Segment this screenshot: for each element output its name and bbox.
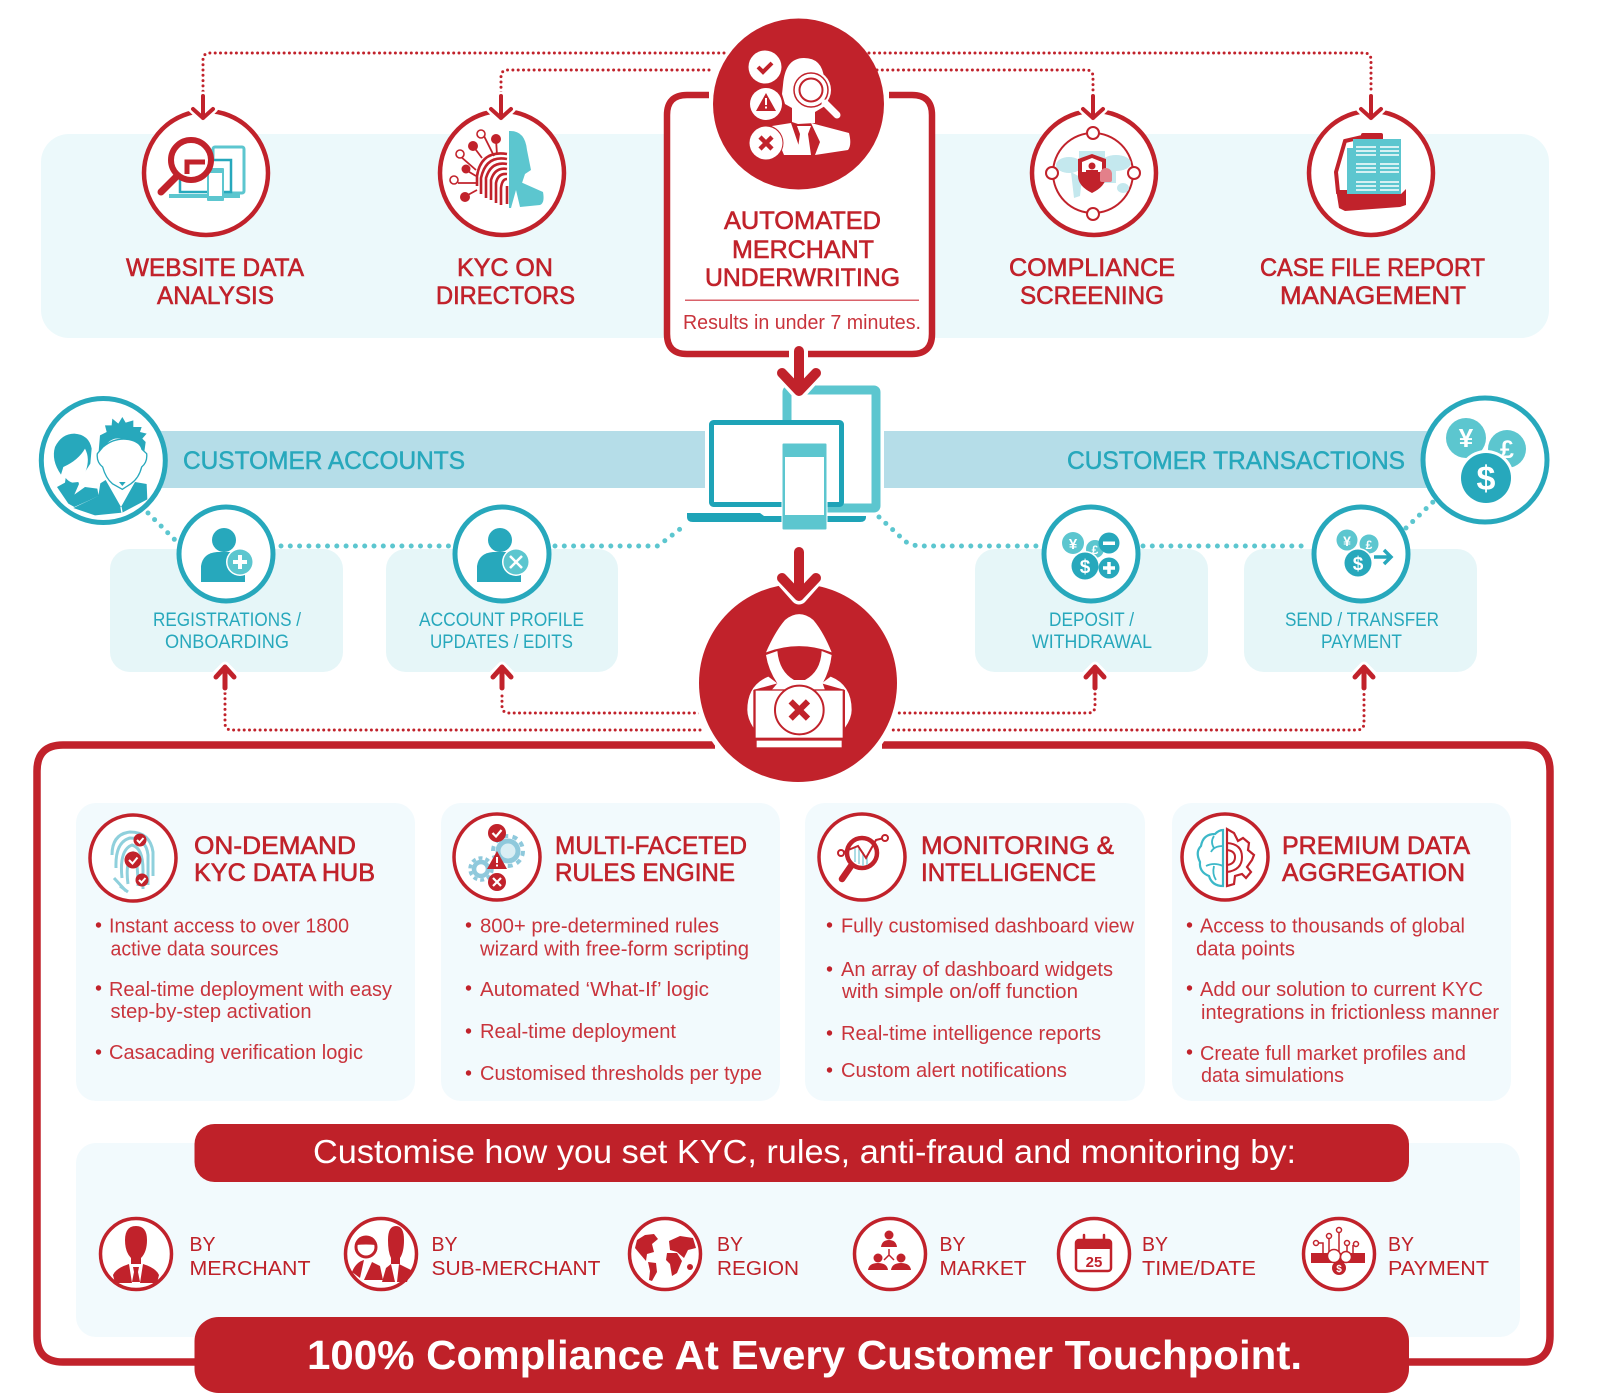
text: deposit withdrawal: WITHDRAWAL: [1032, 632, 1152, 653]
text: by time/date: [1142, 1234, 1256, 1280]
heading: premium data aggregation: PREMIUM DATA: [1282, 832, 1470, 860]
heading: on-demand KYC data hub: KYC DATA HUB: [194, 859, 375, 887]
icon: two people: [346, 1218, 416, 1290]
panel: customise options background: [76, 1143, 1520, 1337]
bullets: multi-faceted rules engine: Customised thresholds per type: [480, 1063, 762, 1085]
text: by merchant: MERCHANT: [190, 1258, 310, 1280]
icon: calendar: [1058, 1218, 1130, 1290]
service: website data analysis: [126, 96, 304, 310]
bullets: multi-faceted rules engine: [466, 916, 762, 1085]
heading: automated merchant underwriting: UNDERWRITING: [705, 264, 900, 292]
heading: multi-faceted rules engine: [555, 832, 747, 887]
bullets: monitoring and intelligence: Real-time intelligence reports: [841, 1023, 1101, 1045]
icon: underwriter with magnifier in red circle: [713, 18, 884, 190]
bullets: multi-faceted rules engine: Real-time deployment: [480, 1021, 676, 1043]
heading: KYC on directors: [436, 254, 575, 310]
heading: website data analysis: ANALYSIS: [157, 282, 274, 310]
text: by market: MARKET: [940, 1258, 1026, 1280]
icon: deposit withdrawal coins: [1044, 507, 1138, 601]
arrow: up to account profile: [492, 666, 512, 688]
bullets: premium data aggregation: Add our solution to current KYC: [1200, 979, 1483, 1001]
banner: customise heading: [194, 1124, 1409, 1182]
option: by market: [854, 1218, 1026, 1290]
heading: premium data aggregation: AGGREGATION: [1282, 859, 1465, 887]
panel: monitoring and intelligence: [805, 803, 1145, 1101]
heading: automated merchant underwriting: MERCHANT: [732, 236, 874, 264]
icon: merchant bust: [100, 1218, 172, 1290]
bullets: on-demand KYC data hub: step-by-step activation: [110, 1001, 312, 1023]
heading: premium data aggregation: [1282, 832, 1470, 887]
text: by merchant: [190, 1234, 310, 1280]
heading: on-demand KYC data hub: ON-DEMAND: [194, 832, 356, 860]
heading: case file report management: [1260, 254, 1485, 310]
text: send transfer payment: PAYMENT: [1321, 632, 1402, 653]
icon: world map globe: [630, 1218, 700, 1290]
bullets: on-demand KYC data hub: active data sources: [110, 938, 278, 960]
banner: customise heading: Customise how you set KYC, rules, anti-fraud and monitoring by:: [313, 1133, 1296, 1170]
bullets: multi-faceted rules engine: wizard with free-form scripting: [479, 938, 749, 960]
banner: customer accounts bar: [100, 431, 705, 488]
text: account profile updates: UPDATES / EDITS: [430, 632, 573, 653]
heading: website data analysis: [126, 254, 304, 310]
bullets: monitoring and intelligence: Custom alert notifications: [841, 1060, 1067, 1082]
panel: deposit withdrawal: [975, 549, 1208, 672]
text: by payment: BY: [1388, 1234, 1414, 1256]
panel: multi-faceted rules engine: [441, 803, 780, 1101]
text: registrations onboarding: [153, 610, 302, 653]
text: by market: BY: [940, 1234, 966, 1256]
heading: compliance screening: SCREENING: [1020, 282, 1164, 310]
arrow: underwriting to devices: [782, 351, 816, 391]
arrow: up to send transfer: [1354, 666, 1374, 688]
text: by region: [717, 1234, 799, 1280]
icon: fingerprint and face: [450, 130, 544, 208]
icon: case file folder: [1336, 133, 1406, 211]
panel: top pale band: [41, 134, 1549, 338]
arrow: into case file: [1360, 96, 1382, 119]
icon: hooded fraudster in red circle: [694, 579, 902, 787]
bullets: premium data aggregation: integrations in frictionless manner: [1201, 1002, 1499, 1024]
heading: monitoring and intelligence: [921, 832, 1114, 887]
option: by merchant: [100, 1218, 310, 1290]
panel: account profile updates: [386, 549, 618, 672]
text: account profile updates: [419, 610, 584, 653]
heading: multi-faceted rules engine: RULES ENGINE: [555, 859, 735, 887]
bullets: multi-faceted rules engine: Automated ‘What-If’ logic: [480, 979, 709, 1001]
text: by sub-merchant: SUB-MERCHANT: [432, 1258, 600, 1280]
arrow: devices to fraudster: [782, 552, 816, 596]
text: by merchant: BY: [190, 1234, 216, 1256]
connector: red dotted lines from fraudster to touchpoints: [225, 690, 1364, 730]
heading: compliance screening: [1009, 254, 1175, 310]
heading: monitoring and intelligence: MONITORING &: [921, 832, 1114, 860]
icon: gears with status marks: [454, 814, 540, 900]
icon: send transfer coins: £: [1366, 538, 1373, 552]
text: by time/date: BY: [1142, 1234, 1168, 1256]
icon: payment network: [1304, 1218, 1374, 1290]
heading: automated merchant underwriting: [705, 207, 900, 292]
bullets: monitoring and intelligence: with simple on/off function: [841, 981, 1078, 1003]
icon: send transfer coins: $: [1353, 554, 1364, 575]
text: by region: REGION: [717, 1258, 799, 1280]
banner: 100% compliance: [194, 1317, 1409, 1393]
bullets: multi-faceted rules engine: 800+ pre-determined rules: [480, 916, 719, 938]
bullets: monitoring and intelligence: Fully customised dashboard view: [841, 916, 1135, 938]
icon: send transfer coins: [1314, 507, 1408, 601]
icon: devices under magnifier: [161, 140, 244, 201]
bullets: on-demand KYC data hub: Real-time deployment with easy: [109, 979, 392, 1001]
bullets: premium data aggregation: data points: [1196, 938, 1295, 960]
heading: case file report management: MANAGEMENT: [1280, 282, 1466, 310]
bullets: premium data aggregation: Access to thousands of global: [1200, 916, 1465, 938]
connector: teal dotted chain: [148, 502, 1433, 546]
banner: customer transactions bar: [884, 431, 1427, 488]
text: by region: BY: [717, 1234, 743, 1256]
arrow: up to deposit: [1085, 666, 1105, 688]
bullets: monitoring and intelligence: An array of dashboard widgets: [841, 959, 1113, 981]
arrow: into website data: [192, 96, 214, 119]
connector: dotted lines from underwriting to top services: [203, 53, 1371, 96]
icon: deposit withdrawal coins: £: [1092, 543, 1099, 557]
service: compliance screening: [1009, 96, 1175, 310]
text: by time/date: TIME/DATE: [1142, 1258, 1256, 1280]
heading: KYC on directors: KYC ON: [457, 254, 553, 282]
service: KYC on directors: [436, 96, 575, 310]
bullets: premium data aggregation: Create full market profiles and: [1200, 1043, 1466, 1065]
icon: calendar: 25: [1086, 1254, 1102, 1271]
text: by market: [940, 1234, 1026, 1280]
icon: add user: [179, 507, 273, 601]
banner: 100% compliance: 100% Compliance At Every Customer Touchpoint.: [307, 1332, 1302, 1378]
bullets: on-demand KYC data hub: Casacading verification logic: [109, 1042, 363, 1064]
text: send transfer payment: [1285, 610, 1439, 653]
icon: fingerprint with checks: [90, 815, 176, 901]
panel: main red frame: [37, 745, 1550, 1362]
bullets: premium data aggregation: data simulations: [1201, 1065, 1344, 1087]
panel: send transfer payment: [1244, 549, 1477, 672]
icon: currency coins circle: ¥: [1459, 423, 1474, 453]
bullets: on-demand KYC data hub: Instant access to over 1800: [109, 916, 349, 938]
text: send transfer payment: SEND / TRANSFER: [1285, 610, 1439, 631]
panel: on-demand KYC data hub: [76, 803, 415, 1101]
option: by payment: [1304, 1218, 1489, 1290]
icon: payment network: $: [1336, 1264, 1342, 1275]
option: by region: [630, 1218, 799, 1290]
heading: customer transactions: CUSTOMER TRANSACTIONS: [1067, 447, 1405, 475]
heading: on-demand KYC data hub: [194, 832, 375, 887]
panel: premium data aggregation: [1172, 803, 1511, 1101]
heading: automated merchant underwriting: AUTOMATED: [724, 207, 881, 235]
panel: registrations onboarding: [110, 549, 343, 672]
bullets: monitoring and intelligence: [827, 916, 1135, 1082]
text: registrations onboarding: ONBOARDING: [165, 632, 289, 653]
icon: deposit withdrawal coins: $: [1080, 557, 1091, 578]
panel: automated merchant underwriting: [667, 95, 932, 354]
arrow: into compliance: [1082, 96, 1104, 119]
icon: edit user: [455, 507, 549, 601]
heading: monitoring and intelligence: INTELLIGENCE: [921, 859, 1096, 887]
icon: brain and gear: [1182, 814, 1268, 900]
arrow: up to registrations: [215, 666, 235, 688]
heading: customer accounts: CUSTOMER ACCOUNTS: [183, 447, 465, 475]
text: deposit withdrawal: [1032, 610, 1152, 653]
arrow: into KYC: [490, 96, 512, 119]
icon: currency coins circle: £: [1500, 436, 1514, 464]
icon: currency coins circle: $: [1477, 460, 1496, 498]
heading: case file report management: CASE FILE REPORT: [1260, 254, 1485, 282]
text: by payment: [1388, 1234, 1489, 1280]
bullets: premium data aggregation: [1187, 916, 1499, 1087]
icon: globe shield ring: [1046, 127, 1140, 220]
icon: laptop tablet phone devices: [687, 390, 876, 530]
heading: KYC on directors: DIRECTORS: [436, 282, 575, 310]
heading: website data analysis: WEBSITE DATA: [126, 254, 304, 282]
icon: deposit withdrawal coins: ¥: [1069, 536, 1078, 553]
option: by time/date: [1058, 1218, 1256, 1290]
option: by sub-merchant: [346, 1218, 600, 1290]
text: account profile updates: ACCOUNT PROFILE: [419, 610, 584, 631]
icon: magnifier over chart: [819, 814, 905, 900]
text: by sub-merchant: BY: [432, 1234, 458, 1256]
text: by sub-merchant: [432, 1234, 600, 1280]
text: registrations onboarding: REGISTRATIONS /: [153, 610, 302, 631]
heading: compliance screening: COMPLIANCE: [1009, 254, 1175, 282]
icon: send transfer coins: ¥: [1343, 533, 1351, 549]
heading: multi-faceted rules engine: MULTI-FACETED: [555, 832, 747, 860]
service: case file report management: [1260, 96, 1485, 310]
text: deposit withdrawal: DEPOSIT /: [1049, 610, 1135, 631]
text: by payment: PAYMENT: [1388, 1258, 1489, 1280]
bullets: on-demand KYC data hub: [96, 916, 392, 1064]
icon: customers circle: [41, 398, 165, 522]
icon: currency coins circle: [1423, 398, 1547, 522]
text: results in under 7 minutes: Results in under 7 minutes.: [683, 312, 921, 334]
icon: market people network: [854, 1218, 926, 1290]
